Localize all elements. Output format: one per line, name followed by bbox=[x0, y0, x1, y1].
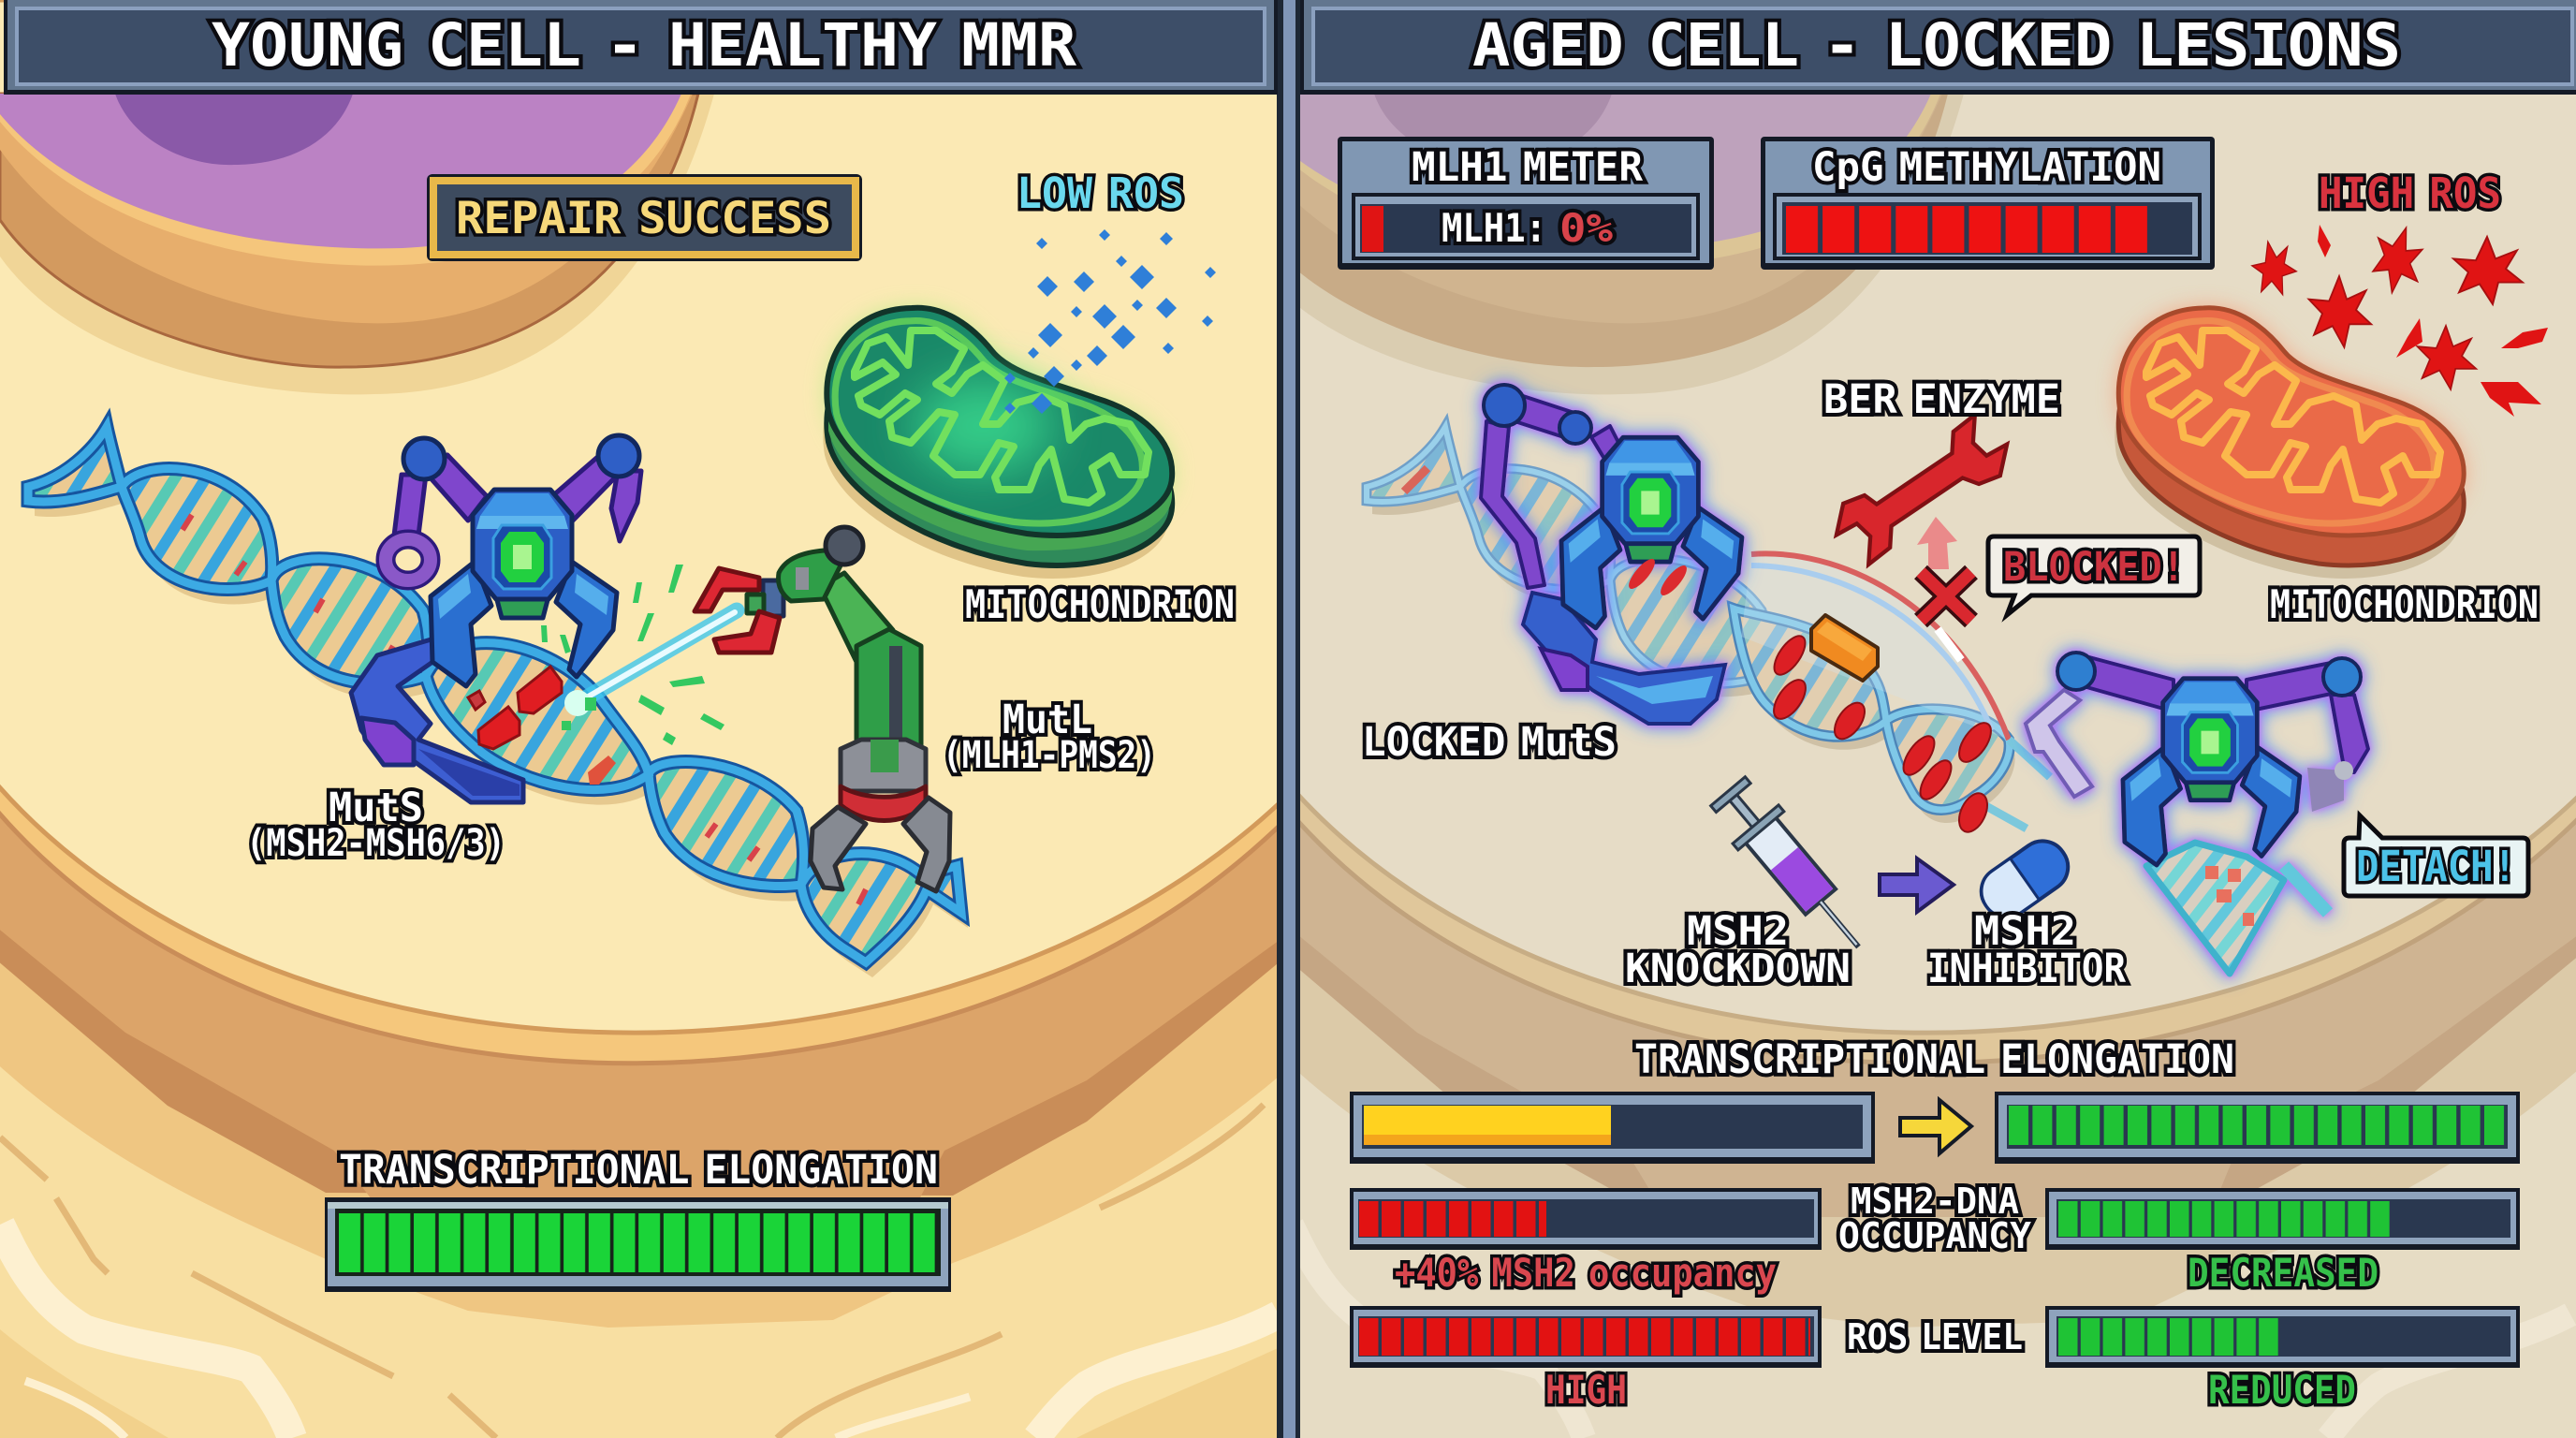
label: MSH2-MSH6/3: (MSH2-MSH6/3) bbox=[246, 822, 505, 865]
aged cytoplasm background bbox=[1298, 0, 2576, 1438]
high ROS bursts bbox=[2248, 217, 2548, 417]
callout: detach: DETACH! bbox=[2356, 842, 2516, 891]
repair beam bbox=[564, 610, 737, 716]
mitochondrion stressed bbox=[2115, 308, 2464, 579]
label: BER enzyme: BER ENZYME bbox=[1823, 376, 2060, 423]
bar: ROS level reduced bbox=[2045, 1306, 2520, 1368]
aged nucleus bbox=[1250, 94, 1964, 394]
label: ROS level: ROS LEVEL bbox=[1847, 1316, 2023, 1357]
label: high ROS: HIGH ROS bbox=[2319, 169, 2501, 218]
callout: blocked: BLOCKED! bbox=[2003, 544, 2185, 591]
nucleus bbox=[0, 94, 714, 394]
cytoplasm background bbox=[0, 1066, 1277, 1438]
label: mitochondrion: MITOCHONDRION bbox=[965, 581, 1235, 627]
frayed DNA end bbox=[1984, 740, 2050, 829]
center divider bbox=[1277, 0, 1300, 1438]
icon: syringe bbox=[1705, 772, 1881, 966]
header: young cell: YOUNG CELL - HEALTHY MMR bbox=[212, 11, 1076, 80]
panel: aged cell locked lesions bbox=[1250, 0, 2576, 1438]
bar: elongation restored green bbox=[1995, 1092, 2520, 1164]
DNA helix bbox=[28, 427, 968, 977]
icon: BER enzyme wrench bbox=[1824, 409, 2019, 570]
MutS robot bbox=[386, 435, 641, 686]
callout: detach bbox=[2344, 815, 2528, 896]
panel: young cell healthy MMR bbox=[0, 0, 1310, 1438]
header: aged cell: AGED CELL - LOCKED LESIONS bbox=[1472, 11, 2401, 80]
bar: ROS level high bbox=[1350, 1306, 1822, 1368]
label: reduced: REDUCED bbox=[2208, 1367, 2356, 1413]
label: MSH2 knockdown bbox=[1625, 908, 1851, 992]
MLH1 meter: 0% bbox=[1559, 205, 1613, 251]
label: transcriptional elongation: TRANSCRIPTIONAL ELONGATION bbox=[339, 1147, 938, 1194]
red lesions bbox=[1767, 631, 1998, 836]
cell membrane band bbox=[0, 0, 1310, 1203]
label: MSH2-DNA occupancy: OCCUPANCY bbox=[1838, 1215, 2031, 1256]
label: locked MutS: LOCKED MutS bbox=[1362, 719, 1617, 766]
arrow: blocked upward bbox=[1917, 517, 1957, 569]
aged sand streaks bbox=[1292, 1225, 2570, 1438]
label: plus 40 percent occupancy: +40% MSH2 occupancy bbox=[1395, 1250, 1777, 1296]
CpG methylation meter bbox=[1761, 137, 2215, 270]
bar: occupancy aged red bbox=[1350, 1188, 1822, 1250]
callout: blocked bbox=[1988, 536, 2200, 615]
MutL robotic arm bbox=[695, 527, 950, 891]
label: MSH2 inhibitor: INHIBITOR bbox=[1927, 946, 2126, 992]
label: high: HIGH bbox=[1545, 1367, 1627, 1413]
red marks on detached DNA bbox=[2205, 866, 2254, 926]
header: young cell bbox=[4, 0, 1278, 95]
sand streaks bbox=[0, 1105, 1279, 1438]
detaching MutS robot bbox=[2026, 653, 2368, 974]
label: low ROS: LOW ROS bbox=[1017, 169, 1184, 218]
aged membrane band bbox=[1282, 0, 2576, 1217]
bar: transcriptional elongation full bbox=[325, 1197, 951, 1292]
badge: repair success bbox=[427, 174, 862, 261]
bar: occupancy decreased green bbox=[2045, 1188, 2520, 1250]
bar: elongation partial yellow bbox=[1350, 1092, 1875, 1164]
label: MSH2-DNA occupancy bbox=[1838, 1181, 2031, 1256]
mitochondrion healthy bbox=[823, 308, 1172, 579]
label: MSH2 inhibitor: MSH2 bbox=[1974, 908, 2076, 955]
faded DNA helix bbox=[1367, 427, 2015, 823]
icon: inhibitor pill bbox=[1972, 831, 2077, 927]
orange CpG block bbox=[1811, 615, 1878, 681]
header: aged cell bbox=[1300, 0, 2576, 95]
green repair sparks bbox=[541, 565, 724, 745]
lesions inside locked clamp bbox=[1625, 555, 1690, 599]
icon: red X bbox=[1921, 572, 1971, 621]
label: decreased: DECREASED bbox=[2188, 1250, 2378, 1296]
label: MSH2 knockdown: MSH2 bbox=[1687, 908, 1789, 955]
label: MLH1-PMS2: (MLH1-PMS2) bbox=[943, 734, 1156, 777]
blocked repair arc bbox=[1741, 553, 2009, 740]
red mismatch lesions bbox=[468, 667, 616, 785]
label: transcriptional elongation aged: TRANSCRIPTIONAL ELONGATION bbox=[1634, 1036, 2234, 1083]
MLH1 meter: MLH1 METER bbox=[1412, 144, 1643, 191]
arrow: knockdown to inhibitor bbox=[1880, 858, 1954, 912]
CpG methylation meter: CpG METHYLATION bbox=[1812, 144, 2161, 191]
label: MutL: MutL bbox=[1003, 697, 1092, 743]
label: MutS: MutS bbox=[329, 785, 423, 831]
locked MutS robot bbox=[1481, 385, 1742, 724]
label: mitochondrion aged: MITOCHONDRION bbox=[2270, 581, 2539, 627]
MLH1 meter bbox=[1338, 137, 1714, 270]
MutS clamp base bbox=[351, 638, 523, 802]
label: MSH2-DNA occupancy: MSH2-DNA bbox=[1851, 1181, 2019, 1222]
MLH1 meter: MLH1: bbox=[1442, 205, 1546, 251]
arrow: yellow improvement bbox=[1900, 1100, 1971, 1153]
badge: repair success: REPAIR SUCCESS bbox=[456, 193, 831, 244]
label: MSH2 knockdown: KNOCKDOWN bbox=[1625, 946, 1851, 992]
label: MSH2 inhibitor bbox=[1927, 908, 2126, 992]
low ROS particles bbox=[1004, 229, 1216, 414]
